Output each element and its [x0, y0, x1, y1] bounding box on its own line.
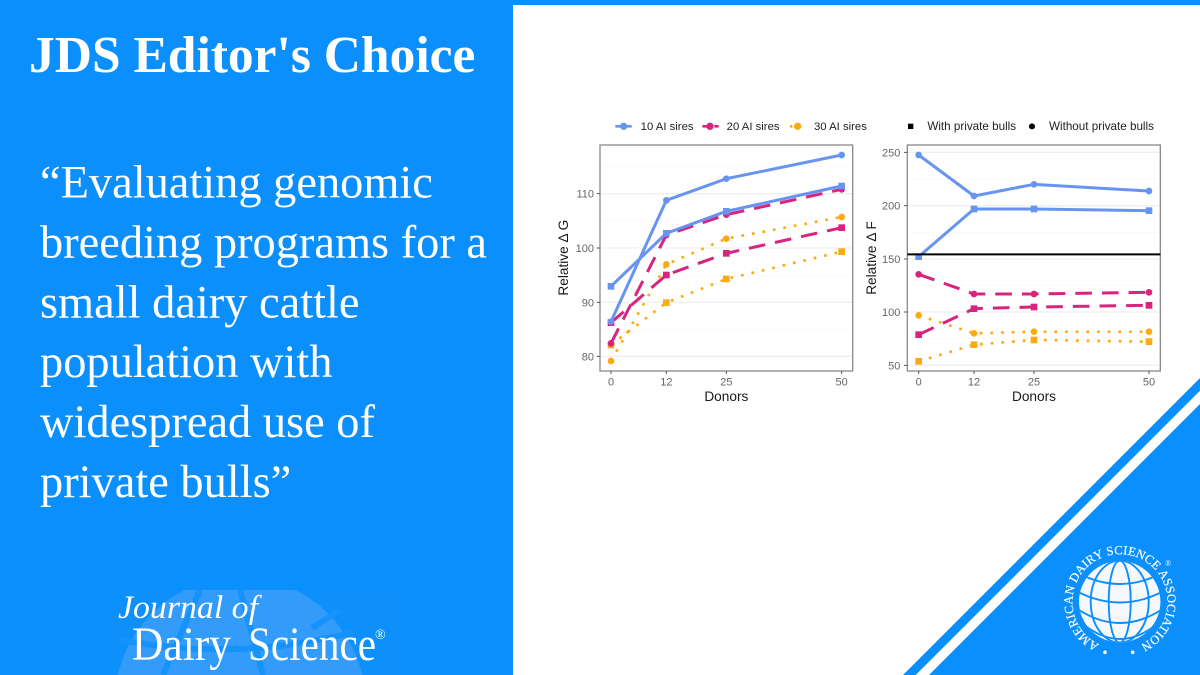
panel: left blue panel: [0, 0, 513, 675]
journal logo: Science: [248, 618, 376, 671]
ring text: AMERICAN DAIRY SCIENCE ASSOCIATION: [1064, 546, 1176, 652]
journal logo: Dairy: [132, 618, 231, 671]
plot panel: [904, 145, 1160, 374]
axis labels: Relative Δ F: [864, 221, 879, 295]
axis labels: 200: [882, 201, 900, 213]
corner blue triangle: [929, 404, 1200, 675]
axis labels: 50: [1143, 377, 1155, 389]
journal logo: [118, 590, 386, 675]
axis labels: 150: [882, 254, 900, 266]
axis labels: 250: [882, 147, 900, 159]
corner diagonal stripe: [903, 378, 1200, 675]
icon: globe: [1078, 561, 1162, 643]
ADSA logo: [1064, 546, 1176, 654]
right chart: relative delta F: [864, 120, 1160, 404]
axis labels: Relative Δ G: [556, 220, 571, 296]
left chart: relative delta G: [556, 121, 867, 404]
axis labels: 12: [968, 377, 980, 389]
series: 10 AI sires: [608, 152, 845, 325]
legend: AI sires: 10 AI sires: [641, 121, 694, 133]
axis labels: Donors: [704, 389, 749, 404]
axis labels: [864, 147, 1155, 404]
registered mark: ®: [1165, 559, 1171, 568]
legend: private bulls: With private bulls: [927, 120, 1016, 133]
legend: AI sires: [615, 121, 867, 133]
journal logo: ®: [375, 628, 386, 643]
reference line: [907, 251, 1160, 257]
axis labels: 12: [660, 377, 672, 389]
axis labels: 0: [608, 377, 614, 389]
axis labels: 100: [576, 243, 594, 255]
series: 30 AI sires: [608, 214, 845, 364]
axis labels: 100: [882, 307, 900, 319]
axis labels: 50: [888, 360, 900, 372]
quote text block: “Evaluating genomic: [40, 158, 433, 208]
series: 20 AI sires: [915, 271, 1152, 338]
quote text block: population with: [40, 337, 333, 388]
legend: AI sires: 20 AI sires: [727, 121, 780, 133]
legend: AI sires: 30 AI sires: [814, 121, 867, 133]
axis labels: 0: [916, 377, 922, 389]
series: 10 AI sires: [915, 152, 1152, 260]
title: JDS Editor's Choice: [29, 27, 475, 84]
axis labels: 25: [1028, 377, 1040, 389]
axis labels: 90: [582, 297, 594, 309]
quote text block: small dairy cattle: [40, 278, 359, 328]
series: 30 AI sires: [915, 312, 1152, 365]
axis labels: Donors: [1012, 389, 1056, 404]
axis labels: [556, 189, 848, 404]
quote text block: [40, 158, 487, 508]
axis labels: 25: [720, 377, 732, 389]
top blue bar: [513, 0, 1200, 5]
series: 20 AI sires: [608, 186, 845, 347]
axis labels: 110: [576, 189, 594, 201]
legend: private bulls: [908, 120, 1154, 133]
axis labels: 80: [582, 351, 594, 363]
axis labels: 50: [836, 377, 848, 389]
journal logo: Journal of: [118, 590, 262, 626]
quote text block: widespread use of: [40, 397, 375, 448]
quote text block: breeding programs for a: [40, 218, 487, 268]
plot panel: [597, 145, 853, 374]
quote text block: private bulls”: [40, 457, 291, 508]
legend: private bulls: Without private bulls: [1049, 120, 1154, 133]
